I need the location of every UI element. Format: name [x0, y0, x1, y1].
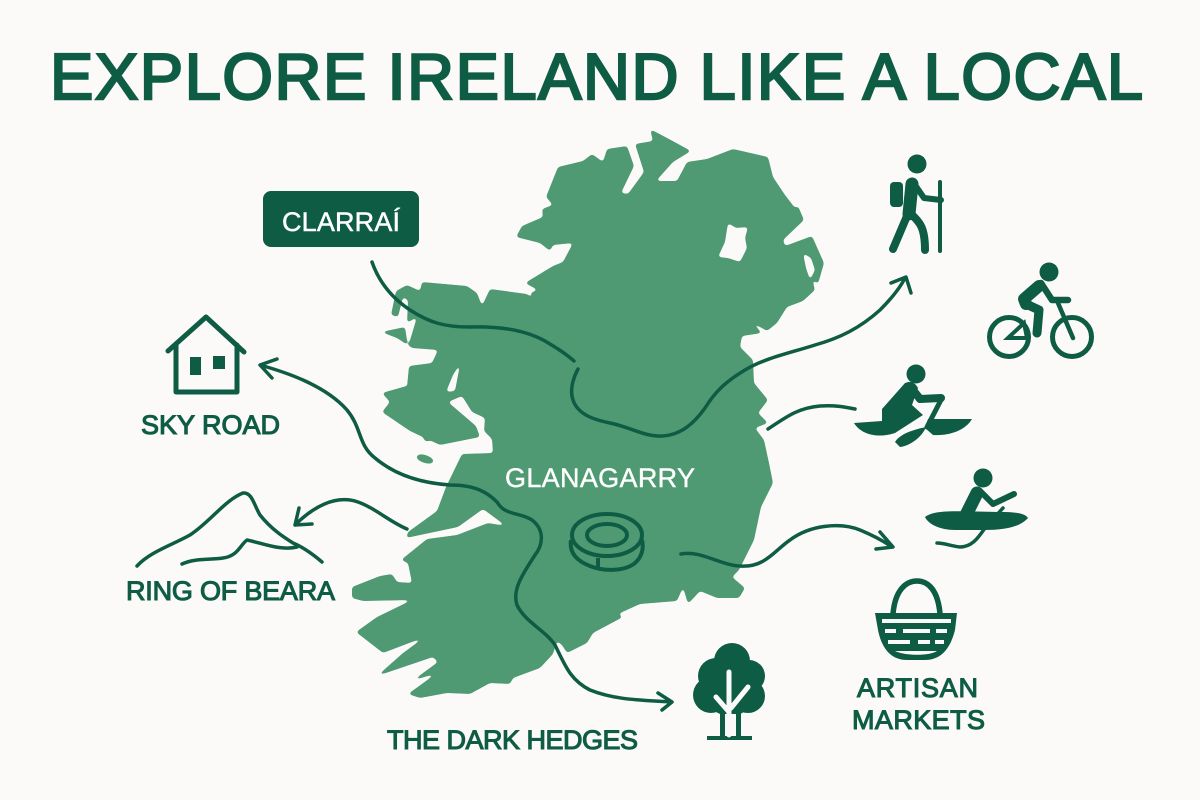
label: Artisan Markets: [852, 673, 985, 735]
arrow: route to hiker: [572, 277, 911, 436]
title: EXPLORE IRELAND LIKE A LOCAL: [50, 40, 1143, 113]
label: Ring of Beara: RING OF BEARA: [126, 576, 335, 606]
label: Glanagarry: GLANAGARRY: [505, 463, 695, 493]
icon: house: [168, 317, 244, 392]
label: Clarraí: CLARRAÍ: [282, 207, 400, 237]
icon: tree: [693, 643, 765, 740]
arrow: route to kayaker: [768, 406, 855, 429]
icon: cyclist: [990, 262, 1092, 356]
icon: kayaker: [854, 364, 972, 447]
map of Ireland: [352, 129, 824, 698]
route: from Clarraí label into map: [372, 262, 574, 361]
icon: basket: [875, 581, 957, 660]
label: Clarraí: [263, 191, 419, 247]
icon: ring fort: [571, 514, 643, 570]
label: Artisan Markets: ARTISAN: [857, 673, 978, 703]
label: The Dark Hedges: THE DARK HEDGES: [387, 725, 638, 755]
icon: mountain: [137, 493, 322, 566]
arrow: route to Ring of Beara: [295, 500, 407, 529]
icon: rower: [925, 468, 1028, 547]
arrow: route to rower: [681, 526, 893, 566]
arrow: route from Sky Road to The Dark Hedges: [260, 359, 672, 710]
icon: hiker: [890, 154, 942, 253]
label: Artisan Markets: MARKETS: [852, 705, 985, 735]
label: Sky Road: SKY ROAD: [141, 410, 280, 440]
